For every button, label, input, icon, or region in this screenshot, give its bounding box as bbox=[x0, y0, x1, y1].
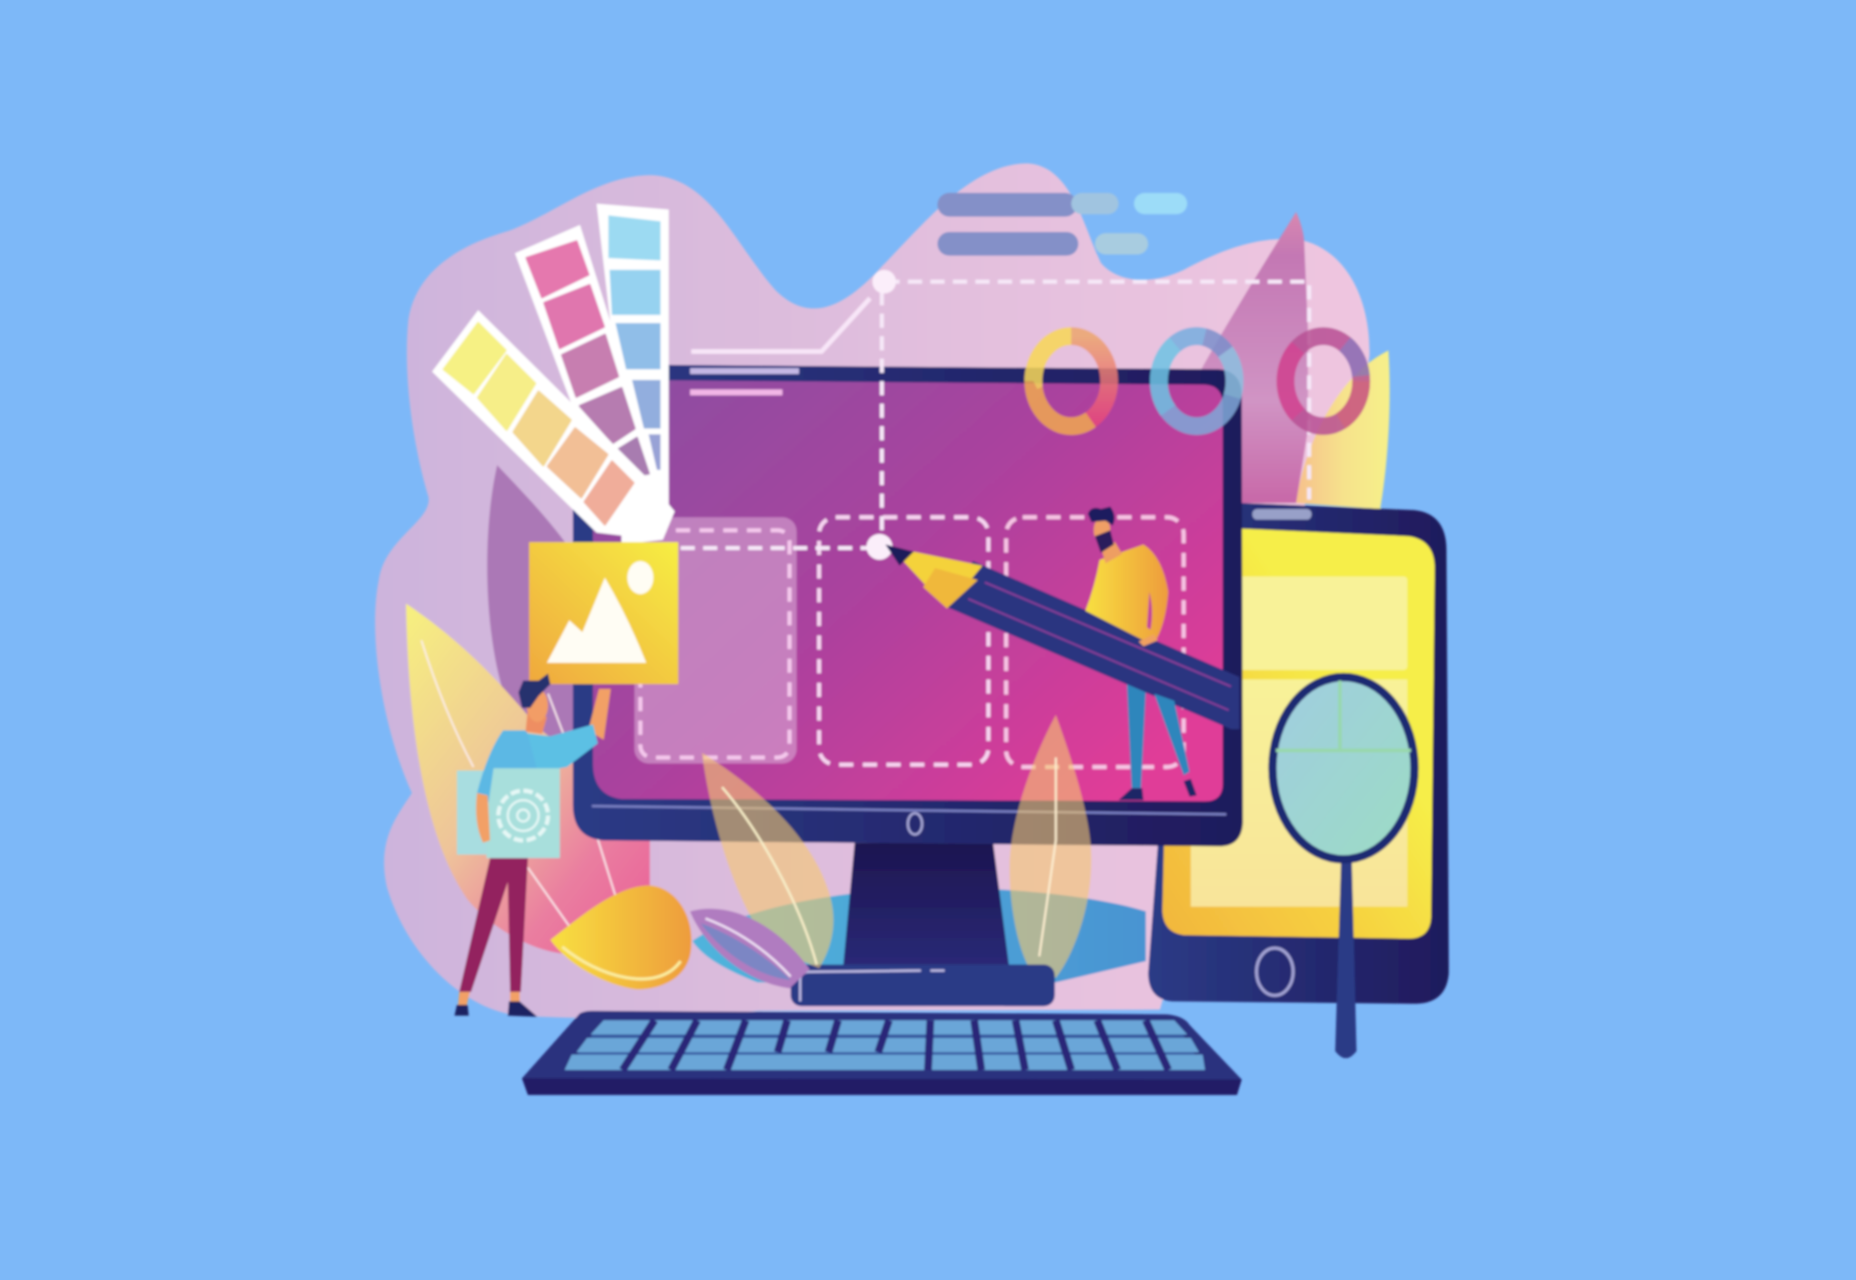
gear icon bbox=[498, 791, 548, 840]
node at pencil tip bbox=[866, 534, 892, 560]
box 1 bbox=[634, 517, 797, 763]
back leaf: yellow right bbox=[1296, 350, 1390, 509]
tablet panel upper bbox=[1231, 576, 1407, 670]
scene group bbox=[375, 163, 1449, 1095]
trend line bbox=[691, 298, 870, 352]
key separators bbox=[623, 1020, 1168, 1070]
rear card bbox=[457, 771, 492, 855]
dashed guide lines bbox=[681, 282, 1309, 548]
top info bars bbox=[937, 193, 1187, 256]
donut orange bbox=[1033, 336, 1109, 426]
yellow strip bbox=[432, 310, 675, 540]
dashed placeholder boxes bbox=[634, 517, 1184, 767]
beard bbox=[1095, 530, 1114, 553]
stand base bbox=[791, 965, 1055, 1006]
translucent leaf on monitor left bbox=[702, 753, 833, 968]
fan knob bbox=[621, 488, 675, 544]
back leaf: large yellow to pink left bbox=[406, 604, 650, 954]
mountain icon bbox=[547, 578, 646, 663]
lens grid bbox=[1276, 681, 1411, 750]
sun icon bbox=[627, 561, 653, 594]
face bbox=[527, 689, 548, 722]
magnifying glass bbox=[1272, 677, 1414, 1058]
stand base overlap bbox=[994, 965, 1055, 1006]
purple leaf bottom bbox=[690, 909, 810, 988]
back leaf: purple triangle top right bbox=[1184, 212, 1308, 503]
face bbox=[1094, 517, 1110, 543]
shoes bbox=[455, 1001, 537, 1017]
picture card bbox=[529, 542, 678, 684]
donut blue bbox=[1159, 336, 1235, 426]
header lines bbox=[690, 368, 799, 374]
tablet panel lower bbox=[1191, 679, 1407, 907]
ankles bbox=[458, 992, 520, 1006]
pink strip bbox=[515, 225, 660, 521]
power button bbox=[908, 813, 922, 834]
donut magenta bbox=[1285, 336, 1361, 426]
translucent leaf on monitor right bbox=[1009, 715, 1091, 978]
hair bbox=[518, 673, 550, 708]
key rows bbox=[591, 1020, 1187, 1035]
tablet screen bbox=[1162, 526, 1435, 939]
legs bbox=[1127, 684, 1146, 788]
monitor bbox=[573, 365, 1243, 846]
designer man right bbox=[1085, 507, 1197, 800]
hand bbox=[1139, 634, 1158, 646]
hair bbox=[1088, 507, 1115, 526]
tablet bbox=[1148, 501, 1449, 1004]
tablet speaker bbox=[1252, 509, 1312, 520]
monitor stand bbox=[843, 843, 1010, 971]
box 3 bbox=[1006, 517, 1184, 767]
trousers bbox=[459, 858, 528, 992]
shoes bbox=[1119, 788, 1143, 800]
monitor body bbox=[573, 365, 1243, 846]
colour swatch fan bbox=[432, 204, 675, 544]
blue strip bbox=[597, 204, 669, 521]
designer man left bbox=[455, 673, 611, 1017]
donut charts bbox=[1033, 336, 1361, 426]
tablet home button bbox=[1256, 948, 1293, 995]
back leaf: purple left bbox=[487, 465, 604, 758]
pencil bbox=[885, 544, 1239, 729]
leaf veins bbox=[421, 640, 616, 928]
handle bbox=[1335, 858, 1356, 1058]
keyboard bbox=[522, 1011, 1242, 1095]
key row gaps bbox=[574, 1027, 1198, 1059]
lower hand bbox=[476, 793, 490, 843]
neck bbox=[1101, 542, 1122, 563]
gold leaf bbox=[550, 885, 691, 990]
pool ellipse bbox=[692, 888, 1146, 982]
monitor screen bbox=[593, 380, 1223, 801]
neck bbox=[526, 708, 547, 734]
background blob bbox=[375, 163, 1370, 1018]
torso bbox=[477, 730, 539, 817]
lens bbox=[1272, 677, 1414, 859]
node top bbox=[872, 270, 896, 294]
raised arm bbox=[588, 689, 611, 740]
gear card bbox=[486, 768, 560, 858]
box 2 bbox=[819, 517, 988, 765]
keyboard body bbox=[522, 1011, 1242, 1095]
tablet body bbox=[1148, 501, 1449, 1004]
shirt bbox=[1085, 544, 1168, 642]
bezel line bbox=[592, 806, 1226, 814]
